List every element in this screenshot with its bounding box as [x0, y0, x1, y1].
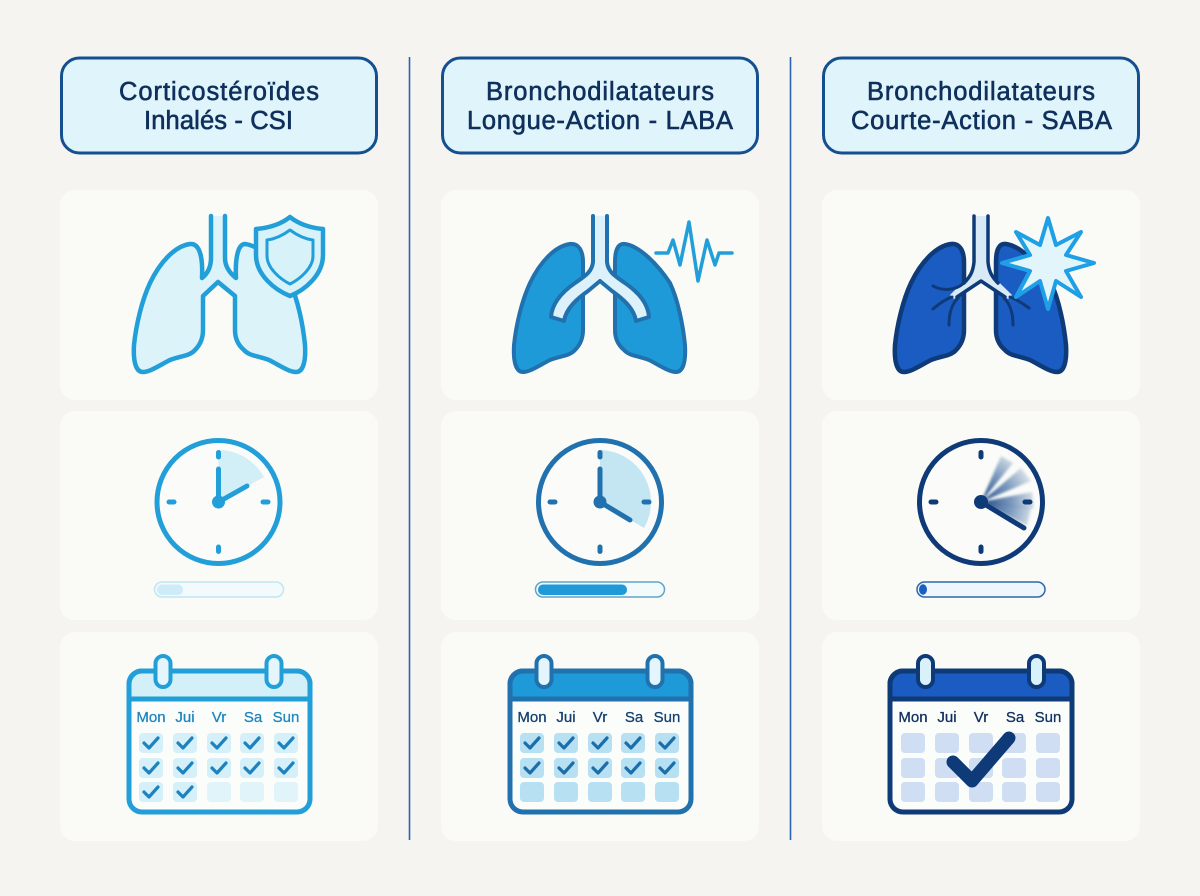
progress bar: SABA [917, 582, 1045, 597]
icon: calendar LABA, 10 of 15 days checked: Sa [625, 709, 644, 726]
heading: Bronchodilatateurs Longue-Action - LABA: Longue-Action - LABA [467, 107, 733, 135]
icon: calendar LABA, 10 of 15 days checked [510, 656, 691, 812]
icon: calendar CSI, 12 of 15 days checked [129, 656, 310, 812]
progress bar: LABA [536, 582, 664, 597]
heading: Bronchodilatateurs Courte-Action - SABA [824, 58, 1138, 153]
panel: CSI lungs [60, 190, 378, 400]
icon: calendar CSI, 12 of 15 days checked: Vr [212, 709, 226, 726]
panel: CSI clock [60, 411, 378, 620]
icon: calendar CSI, 12 of 15 days checked: Sa [244, 709, 263, 726]
panel: LABA lungs [441, 190, 759, 400]
icon: clock, long action wedge [538, 440, 662, 564]
heading: Bronchodilatateurs Longue-Action - LABA: Bronchodilatateurs [486, 78, 714, 106]
icon: calendar SABA, single large check: Sun [1035, 709, 1061, 726]
icon: calendar CSI, 12 of 15 days checked: Sun [273, 709, 299, 726]
icon: calendar CSI, 12 of 15 days checked: Mon [136, 709, 166, 726]
panel: LABA clock [441, 411, 759, 620]
progress bar: CSI [154, 582, 284, 597]
icon: calendar SABA, single large check: Vr [974, 709, 988, 726]
icon: calendar LABA, 10 of 15 days checked: Vr [593, 709, 607, 726]
panel: LABA calendar [441, 632, 759, 841]
heading: Bronchodilatateurs Longue-Action - LABA [442, 58, 758, 153]
heading: Bronchodilatateurs Courte-Action - SABA: Courte-Action - SABA [851, 107, 1112, 135]
icon: calendar SABA, single large check: Sa [1006, 709, 1025, 726]
icon: dark lungs with burst star [895, 216, 1094, 372]
icon: calendar LABA, 10 of 15 days checked: Sun [654, 709, 680, 726]
icon: calendar SABA, single large check: Mon [898, 709, 928, 726]
icon: calendar SABA, single large check [890, 656, 1072, 812]
heading: Corticostéroïdes Inhalés - CSI [62, 58, 376, 153]
heading: Corticostéroïdes Inhalés - CSI: Corticostéroïdes [119, 78, 319, 106]
panel: SABA clock [822, 411, 1140, 620]
icon: blue lungs with pulse line [514, 216, 732, 372]
icon: calendar LABA, 10 of 15 days checked: Mon [517, 709, 547, 726]
panel: SABA lungs [822, 190, 1140, 400]
panel: CSI calendar [60, 632, 378, 841]
heading: Bronchodilatateurs Courte-Action - SABA: Bronchodilatateurs [867, 78, 1095, 106]
icon: clock, motion-blurred hand [920, 440, 1042, 564]
heading: Corticostéroïdes Inhalés - CSI: Inhalés - CSI [144, 107, 293, 135]
icon: calendar CSI, 12 of 15 days checked: Jui [175, 709, 195, 726]
icon: calendar LABA, 10 of 15 days checked: Jui [556, 709, 576, 726]
panel: SABA calendar [822, 632, 1140, 841]
icon: calendar SABA, single large check: Jui [937, 709, 957, 726]
icon: pale lungs with shield [134, 216, 323, 372]
icon: clock, short action wedge [157, 440, 280, 564]
